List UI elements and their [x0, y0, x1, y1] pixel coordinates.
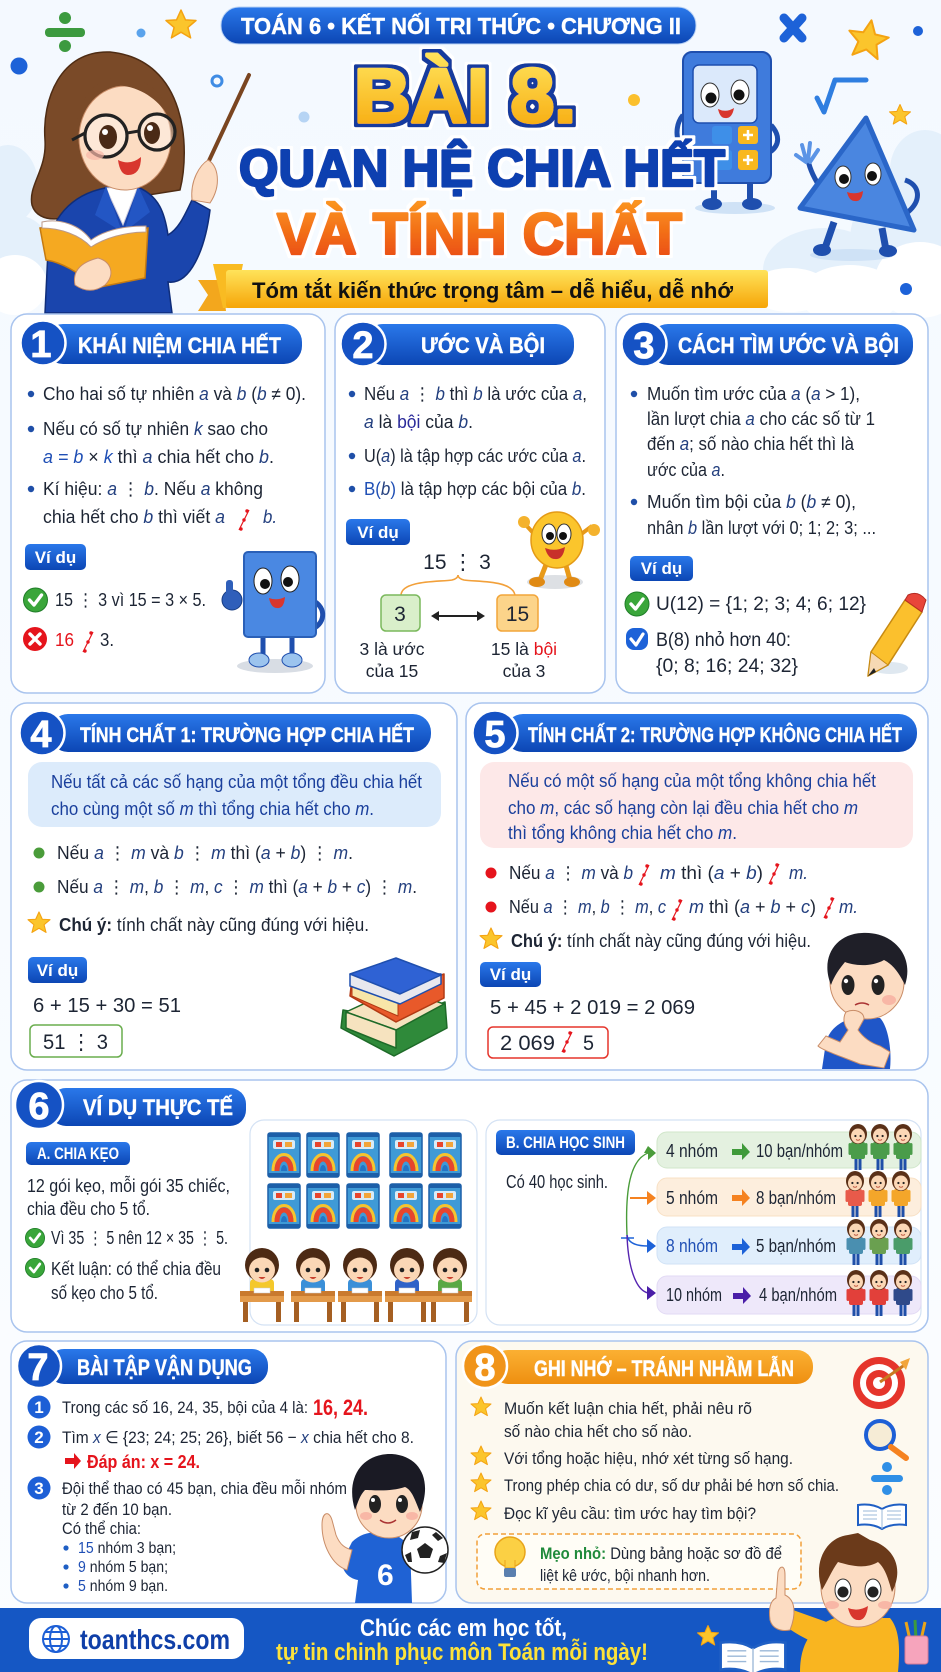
website badge: toanthcs.com: [80, 1624, 230, 1655]
example: [30, 995, 181, 1057]
rules: Nếu a ⋮ m và b: [509, 863, 633, 883]
panel 8: ghi nhớ: [456, 1341, 928, 1603]
property callout: Nếu có một số hạng của một tổng không chia hết: [508, 771, 876, 791]
group row: 8 nhóm: 5 bạn/nhóm: [756, 1236, 836, 1256]
example lines: B(8) nhỏ hơn 40:: [656, 630, 791, 651]
bullet text: chia hết cho b thì viết a: [43, 507, 225, 527]
section b diagram: Có 40 học sinh.: [506, 1172, 608, 1192]
rules: [486, 863, 858, 921]
example lines: U(12) = {1; 2; 3; 4; 6; 12}: [656, 594, 866, 615]
property callout: cho m, các số hạng còn lại đều chia hết cho m: [508, 798, 858, 818]
example tag: [630, 556, 693, 581]
subtitle ribbon: [198, 264, 768, 311]
bullet text: b.: [263, 507, 277, 527]
heading: 5: [484, 714, 506, 756]
division diagram: 15 là bội: [491, 639, 557, 659]
bullet text: Muốn tìm bội của b (b ≠ 0),: [647, 492, 856, 512]
rules: Nếu a ⋮ m, b ⋮ m, c: [509, 897, 666, 917]
example tag: [346, 519, 410, 545]
exercise 3: 5 nhóm 9 bạn.: [78, 1578, 168, 1595]
heading: [20, 320, 302, 366]
example lines: [23, 588, 206, 653]
icon: target: [853, 1357, 910, 1409]
section a text: [25, 1142, 230, 1303]
panel 3: cách tìm ước và bội: [616, 314, 928, 693]
panel 5: tính chất 2: [466, 703, 928, 1070]
exercise 2: Đáp án: x = 24.: [87, 1452, 200, 1472]
heading: [340, 322, 574, 367]
exercise 2: 2: [34, 1428, 44, 1447]
subtitle ribbon: Tóm tắt kiến thức trọng tâm – dễ hiểu, dễ nhớ: [252, 278, 733, 303]
bullet text: U(a) là tập hợp các ước của a.: [364, 446, 586, 466]
exercise 1: [28, 1395, 368, 1420]
panel 1: khái niệm chia hết: [11, 314, 325, 693]
footer: [0, 1533, 941, 1672]
heading: [17, 1344, 268, 1389]
division diagram: 15: [506, 603, 529, 626]
bullet text: nhân b lần lượt với 0; 1; 2; 3; ...: [647, 518, 876, 538]
icon: division sign: [871, 1462, 903, 1495]
exercise 3: 9 nhóm 5 bạn;: [78, 1559, 168, 1576]
rules: m.: [839, 897, 858, 917]
heading: 1: [30, 324, 52, 366]
reminders: Trong phép chia có dư, số dư phải bé hơn số chia.: [504, 1476, 839, 1495]
example: 5 + 45 + 2 019 = 2 069: [490, 997, 695, 1019]
property callout: [480, 762, 913, 848]
rules: m thì (a + b + c): [689, 897, 816, 917]
heading: VÍ DỤ THỰC TẾ: [83, 1095, 233, 1120]
heading: CÁCH TÌM ƯỚC VÀ BỘI: [678, 333, 899, 358]
heading: KHÁI NIỆM CHIA HẾT: [78, 333, 282, 358]
example tag: [28, 957, 87, 983]
heading: 2: [352, 325, 374, 367]
tip box: Mẹo nhỏ: Dùng bảng hoặc sơ đồ để: [540, 1544, 782, 1563]
section b diagram: B. CHIA HỌC SINH: [506, 1133, 625, 1152]
division diagram: 3: [394, 603, 406, 626]
heading: 7: [27, 1347, 49, 1389]
bullet text: đến a; số nào chia hết thì là: [647, 434, 855, 454]
note: Chú ý: tính chất này cũng đúng với hiệu.: [59, 915, 369, 935]
heading: [15, 1081, 246, 1129]
bullet text: [349, 384, 587, 499]
exercise 3: 15 nhóm 3 bạn;: [78, 1540, 176, 1557]
bullet text: Nếu có số tự nhiên k sao cho: [43, 419, 268, 439]
triangle character: [796, 118, 917, 261]
heading: 4: [30, 714, 52, 756]
section a text: A. CHIA KẸO: [37, 1144, 119, 1163]
exercise 2: [28, 1426, 414, 1472]
division diagram: của 3: [503, 661, 545, 681]
section a text: chia đều cho 5 tổ.: [27, 1199, 150, 1219]
icon: boy with ball: 6: [377, 1559, 394, 1592]
example: 6 + 15 + 30 = 51: [33, 995, 181, 1017]
candy and pupils illustration: [240, 1120, 477, 1325]
heading: [472, 710, 917, 756]
bullet text: [631, 384, 876, 538]
group row: 5 nhóm: 5 nhóm: [666, 1188, 718, 1208]
main title: [239, 54, 725, 267]
section a text: 12 gói kẹo, mỗi gói 35 chiếc,: [27, 1175, 230, 1196]
icon: thinking boy: [818, 933, 907, 1069]
tip box: [477, 1534, 801, 1589]
exercise 3: 3: [34, 1479, 44, 1498]
section a text: Kết luận: có thể chia đều: [51, 1259, 221, 1279]
heading: TÍNH CHẤT 1: TRƯỜNG HỢP CHIA HẾT: [80, 723, 414, 747]
example lines: 15 ⋮ 3 vì 15 = 3 × 5.: [55, 590, 206, 610]
exercise 3: [28, 1476, 347, 1595]
exercise 1: 1: [34, 1398, 44, 1417]
division diagram: của 15: [366, 661, 418, 681]
icon: books: [341, 958, 447, 1056]
rules: Nếu a ⋮ m và b ⋮ m thì (a + b) ⋮ m.: [57, 843, 353, 863]
group row: 8 nhóm: 8 nhóm: [666, 1236, 718, 1256]
top badge: [221, 7, 696, 44]
closing message: [276, 1615, 648, 1666]
group row: 4 nhóm: [657, 1124, 921, 1170]
division diagram: 3 là ước: [359, 639, 425, 659]
example: 51 ⋮ 3: [43, 1031, 108, 1054]
reminders: Muốn kết luận chia hết, phải nêu rõ: [504, 1399, 752, 1418]
title line: Quan hệ chia hết: QUAN HỆ CHIA HẾT: [239, 139, 725, 198]
decorative math icons: [10, 10, 923, 295]
property callout: cho cùng một số m thì tổng chia hết cho m.: [51, 799, 374, 819]
closing message: Chúc các em học tốt,: [360, 1615, 567, 1642]
website badge: [29, 1618, 244, 1659]
heading: ƯỚC VÀ BỘI: [421, 333, 545, 358]
bullet text: [28, 384, 306, 531]
title line: Và tính chất: VÀ TÍNH CHẤT: [277, 202, 682, 267]
icon: light bulb: [495, 1537, 525, 1577]
bullet text: Cho hai số tự nhiên a và b (b ≠ 0).: [43, 384, 306, 404]
heading: 8: [474, 1347, 496, 1389]
icon: blue book character: [222, 552, 323, 673]
example tag: Ví dụ: [641, 559, 682, 578]
title line: Bài 8: BÀI 8.: [354, 54, 576, 139]
group row: 10 nhóm: 4 bạn/nhóm: [759, 1285, 837, 1305]
example lines: 3.: [100, 630, 114, 650]
section b diagram: [486, 1120, 921, 1325]
calculator character: [677, 52, 778, 214]
bullet text: Muốn tìm ước của a (a > 1),: [647, 384, 860, 404]
bullet text: ước của a.: [647, 460, 725, 480]
tip box: liệt kê ước, bội nhanh hơn.: [540, 1566, 710, 1585]
group row: 4 nhóm: 10 bạn/nhóm: [756, 1141, 843, 1161]
heading: [622, 322, 913, 367]
example tag: Ví dụ: [35, 548, 76, 567]
exercise 3: Đội thể thao có 45 bạn, chia đều mỗi nhóm: [62, 1479, 347, 1498]
rules: m.: [789, 863, 808, 883]
bullet text: a = b × k thì a chia hết cho b.: [43, 447, 274, 467]
section a text: số kẹo cho 5 tổ.: [51, 1283, 158, 1303]
heading: [463, 1344, 813, 1389]
example tag: Ví dụ: [37, 961, 78, 980]
top badge: TOÁN 6 • KẾT NỐI TRI THỨC • CHƯƠNG II: [241, 12, 681, 39]
icon: smiley character: [518, 512, 600, 589]
example: 5: [583, 1032, 594, 1055]
example: [488, 997, 695, 1058]
example tag: [480, 962, 541, 987]
rules: Nếu a ⋮ m, b ⋮ m, c ⋮ m thì (a + b + c) ⋮ m.: [57, 877, 417, 897]
icon: open book: [858, 1504, 906, 1529]
blue book: [350, 958, 441, 1004]
exercise 1: Trong các số 16, 24, 35, bội của 4 là:: [62, 1398, 308, 1417]
group row: 8 nhóm: [657, 1219, 921, 1265]
reminders: Đọc kĩ yêu cầu: tìm ước hay tìm bội?: [504, 1504, 756, 1523]
bullet text: Kí hiệu: a ⋮ b. Nếu a không: [43, 479, 263, 499]
example lines: {0; 8; 16; 24; 32}: [656, 656, 798, 677]
group row: 4 nhóm: 4 nhóm: [666, 1141, 718, 1161]
bullet text: lần lượt chia a cho các số từ 1: [647, 409, 875, 429]
property callout: [28, 762, 441, 827]
panel 7: bài tập vận dụng: [11, 1341, 448, 1603]
group row: 5 nhóm: 8 bạn/nhóm: [756, 1188, 836, 1208]
icon: star: [698, 1626, 718, 1645]
panel 6: ví dụ thực tế: [11, 1080, 928, 1332]
division diagram: [359, 551, 557, 681]
icon: magnifier: [866, 1421, 906, 1458]
panel 2: ước và bội: [335, 314, 605, 693]
example lines: [625, 592, 866, 677]
bullet text: a là bội của b.: [364, 412, 473, 432]
heading: BÀI TẬP VẬN DỤNG: [77, 1355, 252, 1380]
example: 2 069: [500, 1032, 555, 1055]
exercise 1: 16, 24.: [313, 1395, 368, 1420]
icon: open book: [721, 1642, 785, 1672]
exercise 2: Tìm x ∈ {23; 24; 25; 26}, biết 56 − x chia hết cho 8.: [62, 1428, 414, 1447]
exercise 3: Có thể chia:: [62, 1519, 141, 1538]
reminders: số nào chia hết cho số nào.: [504, 1422, 692, 1441]
property callout: Nếu tất cả các số hạng của một tổng đều chia hết: [51, 772, 422, 792]
note: Chú ý: tính chất này cũng đúng với hiệu.: [511, 931, 811, 951]
reminders: Với tổng hoặc hiệu, nhớ xét từng số hạng.: [504, 1449, 793, 1468]
bullet text: Nếu a ⋮ b thì b là ước của a,: [364, 384, 587, 404]
example lines: 16: [55, 630, 74, 650]
icon: thumbs-up boy: [769, 1533, 899, 1672]
red book: [350, 966, 444, 1022]
property callout: thì tổng không chia hết cho m.: [508, 823, 737, 843]
green book: [341, 988, 447, 1056]
rules: [34, 843, 417, 897]
section a text: Vì 35 ⋮ 5 nên 12 × 35 ⋮ 5.: [51, 1228, 228, 1248]
closing message: tự tin chinh phục môn Toán mỗi ngày!: [276, 1638, 648, 1666]
pupils at desks: [240, 1248, 472, 1322]
group row: 10 nhóm: [657, 1270, 921, 1316]
rules: m thì (a + b): [660, 863, 763, 883]
example tag: [25, 544, 86, 570]
example tag: Ví dụ: [357, 523, 399, 542]
group row: 10 nhóm: 10 nhóm: [666, 1285, 722, 1305]
group row: 5 nhóm: [657, 1171, 921, 1217]
reminders: [471, 1397, 839, 1523]
heading: 6: [28, 1086, 50, 1128]
example tag: Ví dụ: [490, 965, 531, 984]
heading: 3: [633, 325, 655, 367]
panel 4: tính chất 1: [11, 703, 457, 1070]
teacher illustration: [31, 52, 249, 313]
heading: GHI NHỚ – TRÁNH NHẦM LẪN: [534, 1355, 794, 1381]
bullet text: B(b) là tập hợp các bội của b.: [364, 479, 586, 499]
header clouds: [0, 130, 941, 325]
division diagram: 15 ⋮ 3: [423, 551, 491, 574]
exercise 3: từ 2 đến 10 bạn.: [62, 1500, 172, 1519]
heading: [20, 710, 431, 756]
icon: pencil: [868, 593, 926, 676]
icon: boy with ball: [322, 1454, 448, 1603]
icon: pen cup: [905, 1620, 928, 1664]
candy packets: [268, 1133, 461, 1228]
